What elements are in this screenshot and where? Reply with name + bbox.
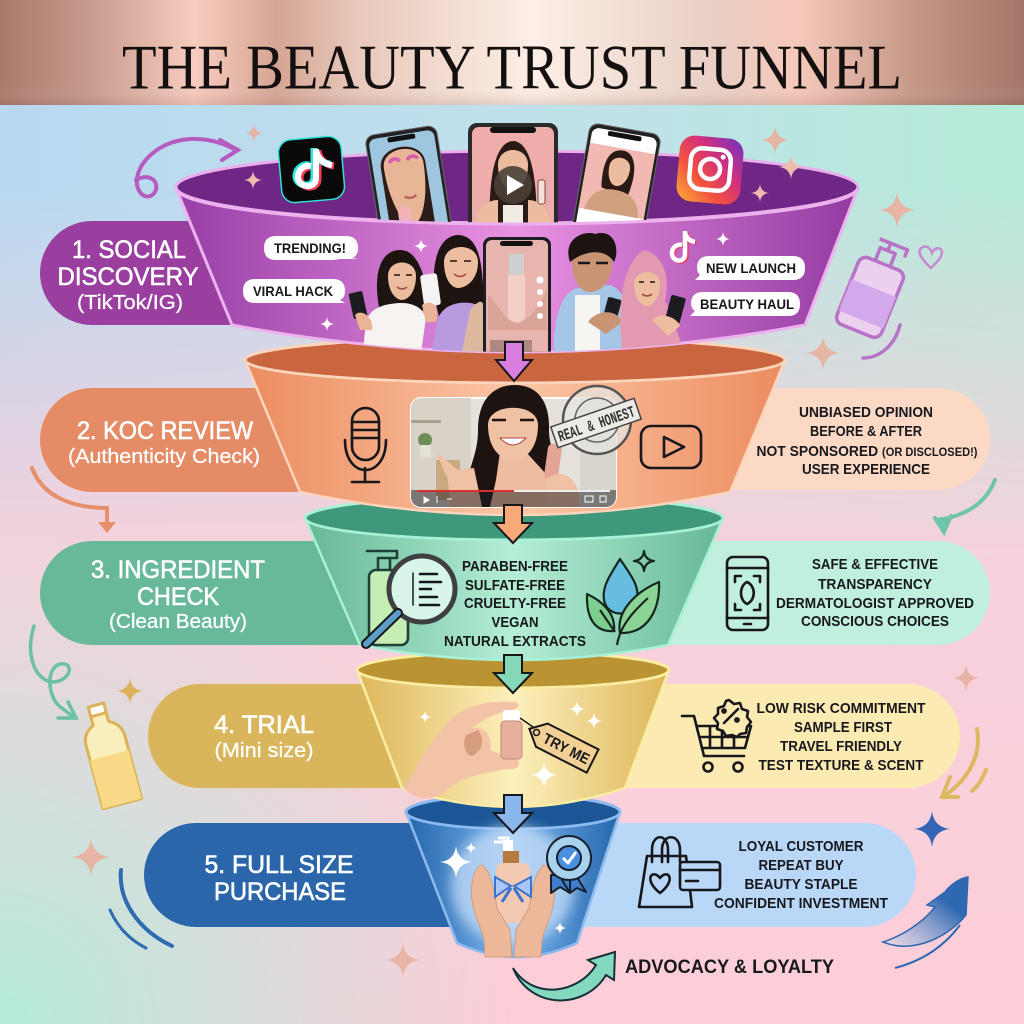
speech bubble: beauty haul: BEAUTY HAUL (700, 296, 794, 312)
person 2 (420, 235, 484, 360)
panel: stage 4 benefits: LOW RISK COMMITMENT (756, 700, 926, 717)
speech bubble: trending (264, 236, 358, 260)
decorative blue arcs (110, 870, 172, 948)
arrow: curved upward (513, 952, 615, 1000)
ingredient list: SULFATE-FREE (465, 577, 565, 594)
icon: instagram logo (675, 134, 745, 206)
tab: stage 5: PURCHASE (214, 878, 346, 906)
tab: stage 2: (Authenticity Check) (68, 446, 260, 468)
funnel stage 1 (176, 123, 858, 362)
tab: stage 1: DISCOVERY (58, 263, 199, 291)
person 3 (554, 233, 632, 360)
arrow: decorative purple curl (136, 139, 238, 197)
funnel stage 4 (357, 652, 669, 807)
speech bubble: new launch (695, 256, 805, 280)
tab: stage 5: 5. FULL SIZE (204, 851, 354, 879)
panel: stage 5 benefits: BEAUTY STAPLE (744, 876, 858, 893)
icon: phone face scan (727, 557, 768, 630)
person 1 (348, 250, 426, 349)
tab: stage 5 (144, 823, 480, 927)
tab: stage 3: (Clean Beauty) (109, 611, 247, 633)
panel: stage 5 benefits: LOYAL CUSTOMER (738, 838, 864, 855)
tab: stage 2: 2. KOC REVIEW (77, 417, 253, 445)
panel: stage 3 benefits: TRANSPARENCY (818, 576, 932, 593)
product in hands (451, 825, 575, 957)
funnel stage 2 (245, 337, 785, 515)
advocacy and loyalty (513, 952, 834, 1000)
person 4 (620, 250, 686, 348)
icon: pump bottle outline (834, 235, 914, 340)
arrow: stage 2 to 3 (494, 505, 532, 543)
icon: bag and credit card (639, 837, 720, 907)
icon: heart outline (920, 247, 942, 268)
header banner (0, 0, 1024, 105)
ingredient list: NATURAL EXTRACTS (444, 633, 586, 650)
phone: play video (468, 123, 558, 235)
sparkles in rim (244, 155, 803, 202)
funnel body (176, 188, 858, 352)
speech bubble: viral hack (243, 279, 345, 303)
small tiktok mark (672, 231, 696, 262)
panel: stage 4 benefits: TEST TEXTURE & SCENT (758, 757, 924, 774)
title: THE BEAUTY TRUST FUNNEL (122, 32, 902, 102)
arrow: decorative teal right (935, 480, 995, 532)
real and honest stamp (551, 386, 641, 454)
tab: stage 1: 1. SOCIAL (72, 236, 186, 264)
arrow: decorative gold (942, 729, 986, 797)
panel: stage 4 benefits: SAMPLE FIRST (794, 719, 892, 736)
tab: stage 4 (148, 684, 420, 788)
speech bubble: viral hack: VIRAL HACK (253, 283, 333, 299)
tab: stage 4: 4. TRIAL (214, 711, 314, 739)
arrow: stage 1 to 2 (496, 342, 532, 381)
arrow: blue swoosh (883, 877, 968, 968)
ingredient list: CRUELTY-FREE (464, 595, 566, 612)
icon: bottle under magnifier (366, 551, 455, 645)
panel: stage 3 benefits: CONSCIOUS CHOICES (801, 613, 949, 630)
panel: stage 4 benefits (600, 684, 960, 788)
tab: stage 1 (40, 221, 260, 325)
icon: droplet and leaves (587, 551, 659, 645)
presenter (436, 385, 580, 507)
speech bubble: beauty haul (690, 292, 800, 316)
icon: shopping cart (682, 700, 751, 772)
tab: stage 3: 3. INGREDIENT (91, 556, 265, 584)
phone: tutorial (365, 125, 454, 250)
ingredient list: VEGAN (492, 614, 538, 631)
icon: sparkles (440, 842, 566, 934)
tab: stage 4: (Mini size) (214, 740, 314, 762)
icon: play button (641, 426, 701, 468)
try me tag: TRY ME (540, 730, 592, 768)
panel: stage 3 benefits: DERMATOLOGIST APPROVED (776, 595, 974, 612)
funnel stage 5 (406, 795, 620, 957)
ingredient list: PARABEN-FREE (462, 558, 568, 575)
panel: stage 5 benefits: REPEAT BUY (758, 857, 844, 874)
arrow: stage 3 to 4 (494, 655, 532, 693)
tab: stage 3: CHECK (137, 583, 219, 611)
panel: stage 3 benefits: SAFE & EFFECTIVE (812, 556, 938, 573)
panel: stage 5 benefits: CONFIDENT INVESTMENT (714, 895, 888, 912)
sparkles in body (320, 232, 730, 331)
try me tag (520, 717, 599, 773)
icon: tiktok logo (277, 135, 346, 204)
panel: stage 2 benefits: NOT SPONSORED (OR DISCLOSED!) (756, 443, 978, 460)
tab: stage 3 (40, 541, 380, 645)
speech bubble: new launch: NEW LAUNCH (706, 260, 796, 276)
speech bubble: trending: TRENDING! (274, 240, 346, 256)
real and honest stamp: REAL & HONEST (556, 403, 638, 446)
decorative sparkles (72, 124, 979, 977)
video card (411, 385, 641, 507)
center phone (483, 237, 551, 362)
decorative purple arc (863, 325, 900, 358)
icon: verified badge (547, 836, 591, 893)
funnel stage 3 (305, 496, 723, 660)
icon: microphone (345, 408, 386, 482)
panel: stage 2 benefits: UNBIASED OPINION (799, 404, 933, 421)
hand with mini bottle (404, 702, 522, 798)
arrow: stage 4 to 5 (494, 795, 532, 833)
panel: stage 2 benefits: BEFORE & AFTER (810, 423, 922, 440)
arrow: decorative teal left (31, 626, 76, 718)
panel: stage 4 benefits: TRAVEL FRIENDLY (780, 738, 902, 755)
advocacy and loyalty: ADVOCACY & LOYALTY (625, 957, 834, 978)
panel: stage 2 benefits: USER EXPERIENCE (802, 461, 930, 478)
panel: stage 5 benefits (560, 823, 916, 927)
icon: sparkles (419, 701, 602, 788)
tab: stage 1: (TikTok/IG) (77, 292, 183, 314)
tab: stage 2 (40, 388, 330, 492)
panel: stage 3 benefits (650, 541, 990, 645)
ingredient list (444, 558, 586, 650)
panel: stage 2 benefits (700, 388, 990, 490)
arrow: decorative orange (32, 468, 116, 533)
icon: yellow bottle (77, 700, 142, 809)
phone: instagram post (571, 123, 661, 243)
